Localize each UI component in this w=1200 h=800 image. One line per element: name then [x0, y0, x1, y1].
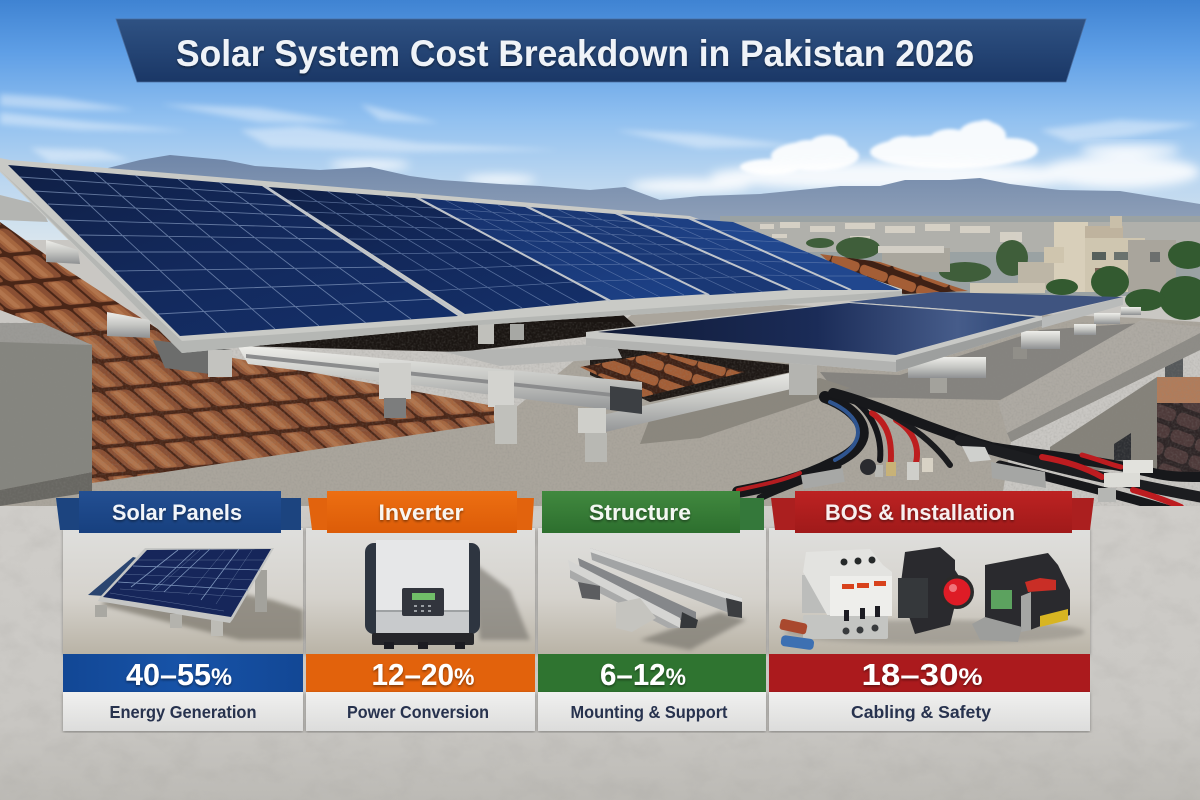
dark gap beneath array — [180, 312, 640, 352]
green banner — [542, 491, 764, 533]
big building — [1018, 216, 1176, 292]
terracotta tile roof — [0, 222, 494, 483]
cables — [738, 393, 1200, 510]
lower concrete background — [0, 506, 1200, 800]
posts — [379, 363, 411, 399]
orange banner — [308, 491, 534, 533]
card image: inverter — [306, 528, 535, 654]
tiles visible beneath panels — [590, 345, 815, 402]
mountains — [108, 155, 1200, 240]
caption: Cabling & Safety — [851, 702, 991, 722]
panel 5 — [618, 214, 850, 290]
panel 1 — [8, 165, 458, 336]
panel 3 — [418, 198, 708, 300]
background: sky — [0, 0, 1200, 240]
orange banner: Inverter — [378, 500, 464, 525]
caption: Mounting & Support — [570, 702, 728, 722]
stat: 6-12% — [538, 654, 766, 692]
far terracotta roof — [820, 254, 968, 294]
panel 4 — [528, 207, 790, 295]
rooftop concrete surface — [0, 300, 1200, 510]
city skyline and big building — [720, 216, 1200, 320]
clouds — [0, 94, 1200, 193]
stat: 40-55% — [63, 654, 303, 692]
small grey module — [972, 617, 1022, 642]
card image: BOS components — [769, 528, 1090, 654]
coloured clips — [779, 618, 808, 635]
red banner: BOS & Installation — [825, 500, 1015, 525]
stat: 18-30%: 18–30 % — [862, 657, 983, 692]
stat: 12-20%: 12–20% — [372, 657, 474, 692]
panel: Solar Panels — [56, 491, 303, 731]
title text: Solar System Cost Breakdown in Pakistan 2026 — [176, 33, 974, 74]
panel 6 — [690, 219, 900, 290]
stat: 6-12%: 6–12% — [600, 657, 686, 692]
red banner — [771, 491, 1094, 533]
stat: 18-30% — [769, 654, 1090, 692]
far right tiled roof — [1157, 357, 1200, 473]
card image: solar panels — [63, 528, 303, 654]
stat: 12-20% — [306, 654, 535, 692]
stat: 40-55%: 40–55% — [126, 657, 232, 692]
flat solar panels — [586, 292, 1123, 372]
concrete texture overlay — [0, 322, 1200, 512]
caption — [538, 692, 766, 731]
combiner box — [985, 553, 1070, 632]
blue banner: Solar Panels — [112, 500, 242, 525]
panel 2 — [268, 187, 608, 314]
isolator with red knob — [898, 547, 974, 634]
mounting rails — [0, 195, 1141, 462]
solar array, tilted panels — [0, 158, 902, 353]
panel: BOS & Installation — [769, 491, 1094, 731]
caption: Power Conversion — [347, 702, 489, 722]
rail end — [610, 386, 642, 414]
concrete block, left — [0, 323, 92, 506]
caption — [769, 692, 1090, 731]
caption — [306, 692, 535, 731]
title banner — [116, 19, 1086, 82]
caption: Energy Generation — [110, 702, 256, 722]
surge protector — [802, 549, 892, 639]
panel: Structure — [538, 491, 766, 731]
card image: rails — [538, 528, 766, 654]
caption — [63, 692, 303, 731]
blue banner — [56, 491, 301, 533]
green banner: Structure — [589, 500, 691, 525]
cable connectors — [801, 446, 1153, 502]
parapet wall under ledge — [1050, 377, 1157, 470]
concrete ledge — [1007, 333, 1200, 442]
panel: Inverter — [306, 491, 535, 731]
